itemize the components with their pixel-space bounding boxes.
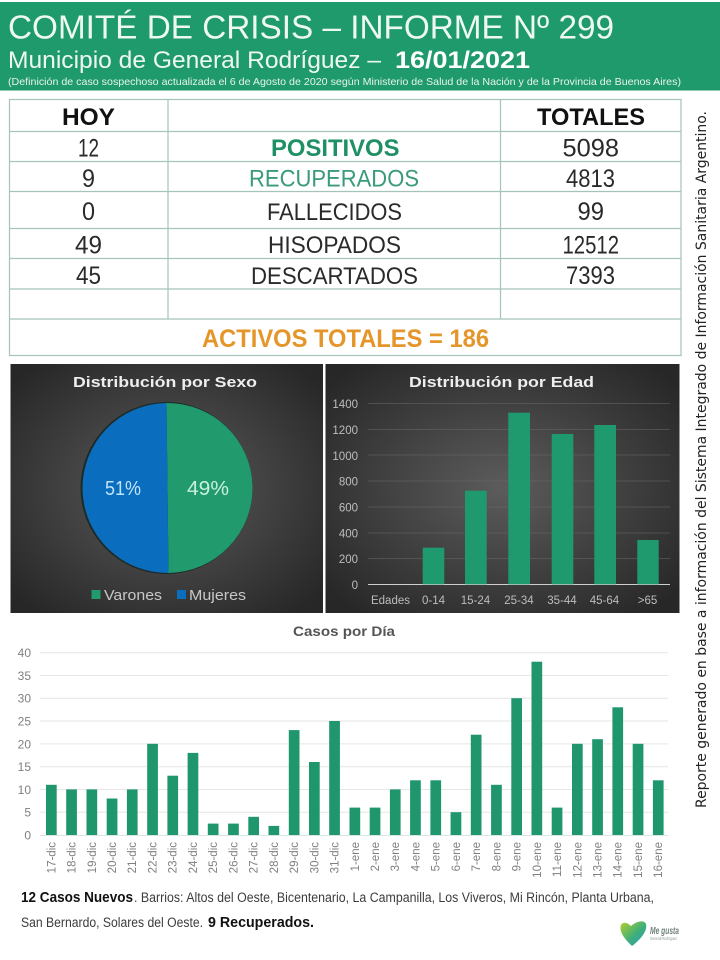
- legend: Varones: [104, 588, 162, 604]
- bar chart: age: 800: [339, 476, 358, 488]
- row: descartados: 45: [76, 262, 101, 290]
- row: recuperados: 4813: [566, 165, 615, 193]
- footer summary: [21, 889, 654, 931]
- bar chart: cases per day: 8-ene: [491, 842, 503, 871]
- bar chart: cases per day: 6-ene: [451, 842, 463, 871]
- bar chart: cases per day: 29-dic: [289, 842, 301, 873]
- row: hisopados: HISOPADOS: [268, 232, 401, 259]
- bar chart: cases per day: 22-dic: [148, 842, 160, 873]
- bar chart: cases per day: 18-dic: [66, 842, 78, 873]
- bar chart: age: 1000: [332, 451, 358, 463]
- bar chart: age: 45-64: [590, 595, 620, 607]
- bar chart: cases per day: 5-ene: [431, 842, 443, 871]
- definition note: (Definición de caso sospechoso actualizada el 6 de Agosto de 2020 según Ministerio de Salud de la Nación y de la Provincia de Buenos Aires): [8, 76, 681, 88]
- bar chart: cases per day: 25-dic: [208, 842, 220, 873]
- bar chart: cases per day: 11-ene: [552, 842, 564, 877]
- bar chart: cases per day: 20: [18, 738, 31, 752]
- footer summary: San Bernardo, Solares del Oeste.: [21, 915, 203, 930]
- bar chart: cases per day: 15: [18, 760, 31, 774]
- bar chart: cases per day: 30: [18, 692, 31, 706]
- footer summary: 12 Casos Nuevos: [21, 889, 133, 906]
- legend: Mujeres: [189, 588, 246, 604]
- row: fallecidos: FALLECIDOS: [267, 199, 402, 226]
- bar chart: age: 1200: [332, 425, 358, 437]
- bar chart: age: 15-24: [461, 595, 491, 607]
- bar chart: cases per day: 24-dic: [188, 842, 200, 873]
- bar chart: cases per day: 25: [18, 714, 31, 728]
- title: COMITÉ DE CRISIS – INFORME Nº 299: [8, 8, 614, 46]
- row: hisopados: 12512: [562, 232, 619, 260]
- row: fallecidos: 0: [82, 198, 95, 226]
- bar chart: cases per day: 12-ene: [572, 842, 584, 878]
- bar chart: cases per day: 19-dic: [87, 842, 99, 873]
- bar chart: cases per day: 21-dic: [127, 842, 139, 873]
- vertical source note: Reporte generado en base a información del Sistema Integrado de Información Sanitaria Argentino.: [694, 111, 710, 808]
- bar chart: cases per day: 35: [18, 669, 31, 683]
- legend: [92, 588, 246, 604]
- bar chart: cases per day: 17-dic: [46, 842, 58, 873]
- row: descartados: DESCARTADOS: [251, 263, 418, 290]
- logo: me gusta general rodríguez: Me gusta: [650, 926, 679, 937]
- bar chart: cases per day: 5: [24, 806, 31, 820]
- bar chart: age: [332, 399, 670, 607]
- bar chart: age: 35-44: [547, 595, 577, 607]
- bar chart: cases per day: 13-ene: [592, 842, 604, 878]
- column heading: hoy: HOY: [62, 104, 115, 131]
- logo: me gusta general rodríguez: General Rodríguez: [650, 936, 678, 941]
- bar chart: cases per day: 23-dic: [168, 842, 180, 873]
- row: descartados: 7393: [566, 262, 615, 290]
- row: recuperados: RECUPERADOS: [249, 166, 419, 192]
- bar chart: cases per day: 31-dic: [330, 842, 342, 873]
- header banner: [0, 2, 720, 90]
- bar chart: cases per day: 4-ene: [410, 842, 422, 871]
- icon: heart: [620, 921, 646, 946]
- bar chart: cases per day: 2-ene: [370, 842, 382, 871]
- bar chart: age: 400: [339, 528, 358, 540]
- bar chart: cases per day: 14-ene: [613, 842, 625, 878]
- bar chart: cases per day: 30-dic: [309, 842, 321, 873]
- bar chart: cases per day: 15-ene: [633, 842, 645, 878]
- bar chart: cases per day: 10: [18, 783, 31, 797]
- row: fallecidos: [82, 198, 604, 226]
- pie chart: [80, 402, 253, 574]
- panel: distribution by age: [326, 364, 680, 613]
- row: descartados: [76, 262, 615, 290]
- bar chart: cases per day: 27-dic: [249, 842, 261, 873]
- panel heading: age: Distribución por Edad: [409, 375, 594, 391]
- bar chart: age: 0: [352, 580, 358, 592]
- bar chart: age: 600: [339, 502, 358, 514]
- bar chart: cases per day: 7-ene: [471, 842, 483, 871]
- bar chart: age: Edades: [371, 595, 410, 607]
- bar chart: cases per day: 26-dic: [228, 842, 240, 873]
- bar chart: cases per day: 20-dic: [107, 842, 119, 873]
- row: recuperados: 9: [82, 165, 95, 193]
- bar chart: cases per day: 40: [18, 646, 31, 660]
- row: positivos: [78, 134, 619, 162]
- bar chart: cases per day: 3-ene: [390, 842, 402, 871]
- footer summary: . Barrios: Altos del Oeste, Bicentenario, La Campanilla, Los Viveros, Mi Rincón, Planta Urbana,: [134, 890, 654, 905]
- row: hisopados: [75, 232, 619, 260]
- pie chart: 49%: [187, 478, 229, 500]
- bar chart: cases per day: 16-ene: [653, 842, 665, 878]
- chart heading: cases per day: Casos por Día: [293, 623, 395, 639]
- row: positivos: POSITIVOS: [271, 135, 400, 162]
- row: hisopados: 49: [75, 232, 102, 260]
- bar chart: cases per day: 28-dic: [269, 842, 281, 873]
- bar chart: age: 1400: [332, 399, 358, 411]
- logo: me gusta general rodríguez: [620, 921, 679, 946]
- bar chart: cases per day: 9-ene: [512, 842, 524, 871]
- bar chart: age: 0-14: [422, 595, 446, 607]
- row: positivos: 5098: [562, 134, 619, 162]
- bar chart: cases per day: [18, 646, 668, 878]
- row: positivos: 12: [78, 134, 99, 162]
- bar chart: cases per day: 0: [24, 828, 31, 842]
- subtitle: Municipio de General Rodríguez –: [8, 47, 382, 74]
- bar chart: cases per day: 10-ene: [532, 842, 544, 878]
- bar chart: age: 25-34: [504, 595, 534, 607]
- column heading: totales: TOTALES: [537, 104, 645, 131]
- bar chart: age: >65: [638, 595, 657, 607]
- bar chart: cases per day: 1-ene: [350, 842, 362, 871]
- report date: 16/01/2021: [395, 47, 530, 74]
- panel: distribution by sex: [10, 364, 323, 613]
- footer summary: 9 Recuperados.: [208, 914, 314, 931]
- active total callout: ACTIVOS TOTALES = 186: [202, 325, 489, 353]
- pie chart: 51%: [105, 478, 141, 500]
- row: fallecidos: 99: [578, 198, 604, 226]
- bar chart: age: 200: [339, 554, 358, 566]
- data table: [10, 100, 681, 356]
- row: recuperados: [82, 165, 615, 193]
- panel heading: sex: Distribución por Sexo: [73, 375, 257, 391]
